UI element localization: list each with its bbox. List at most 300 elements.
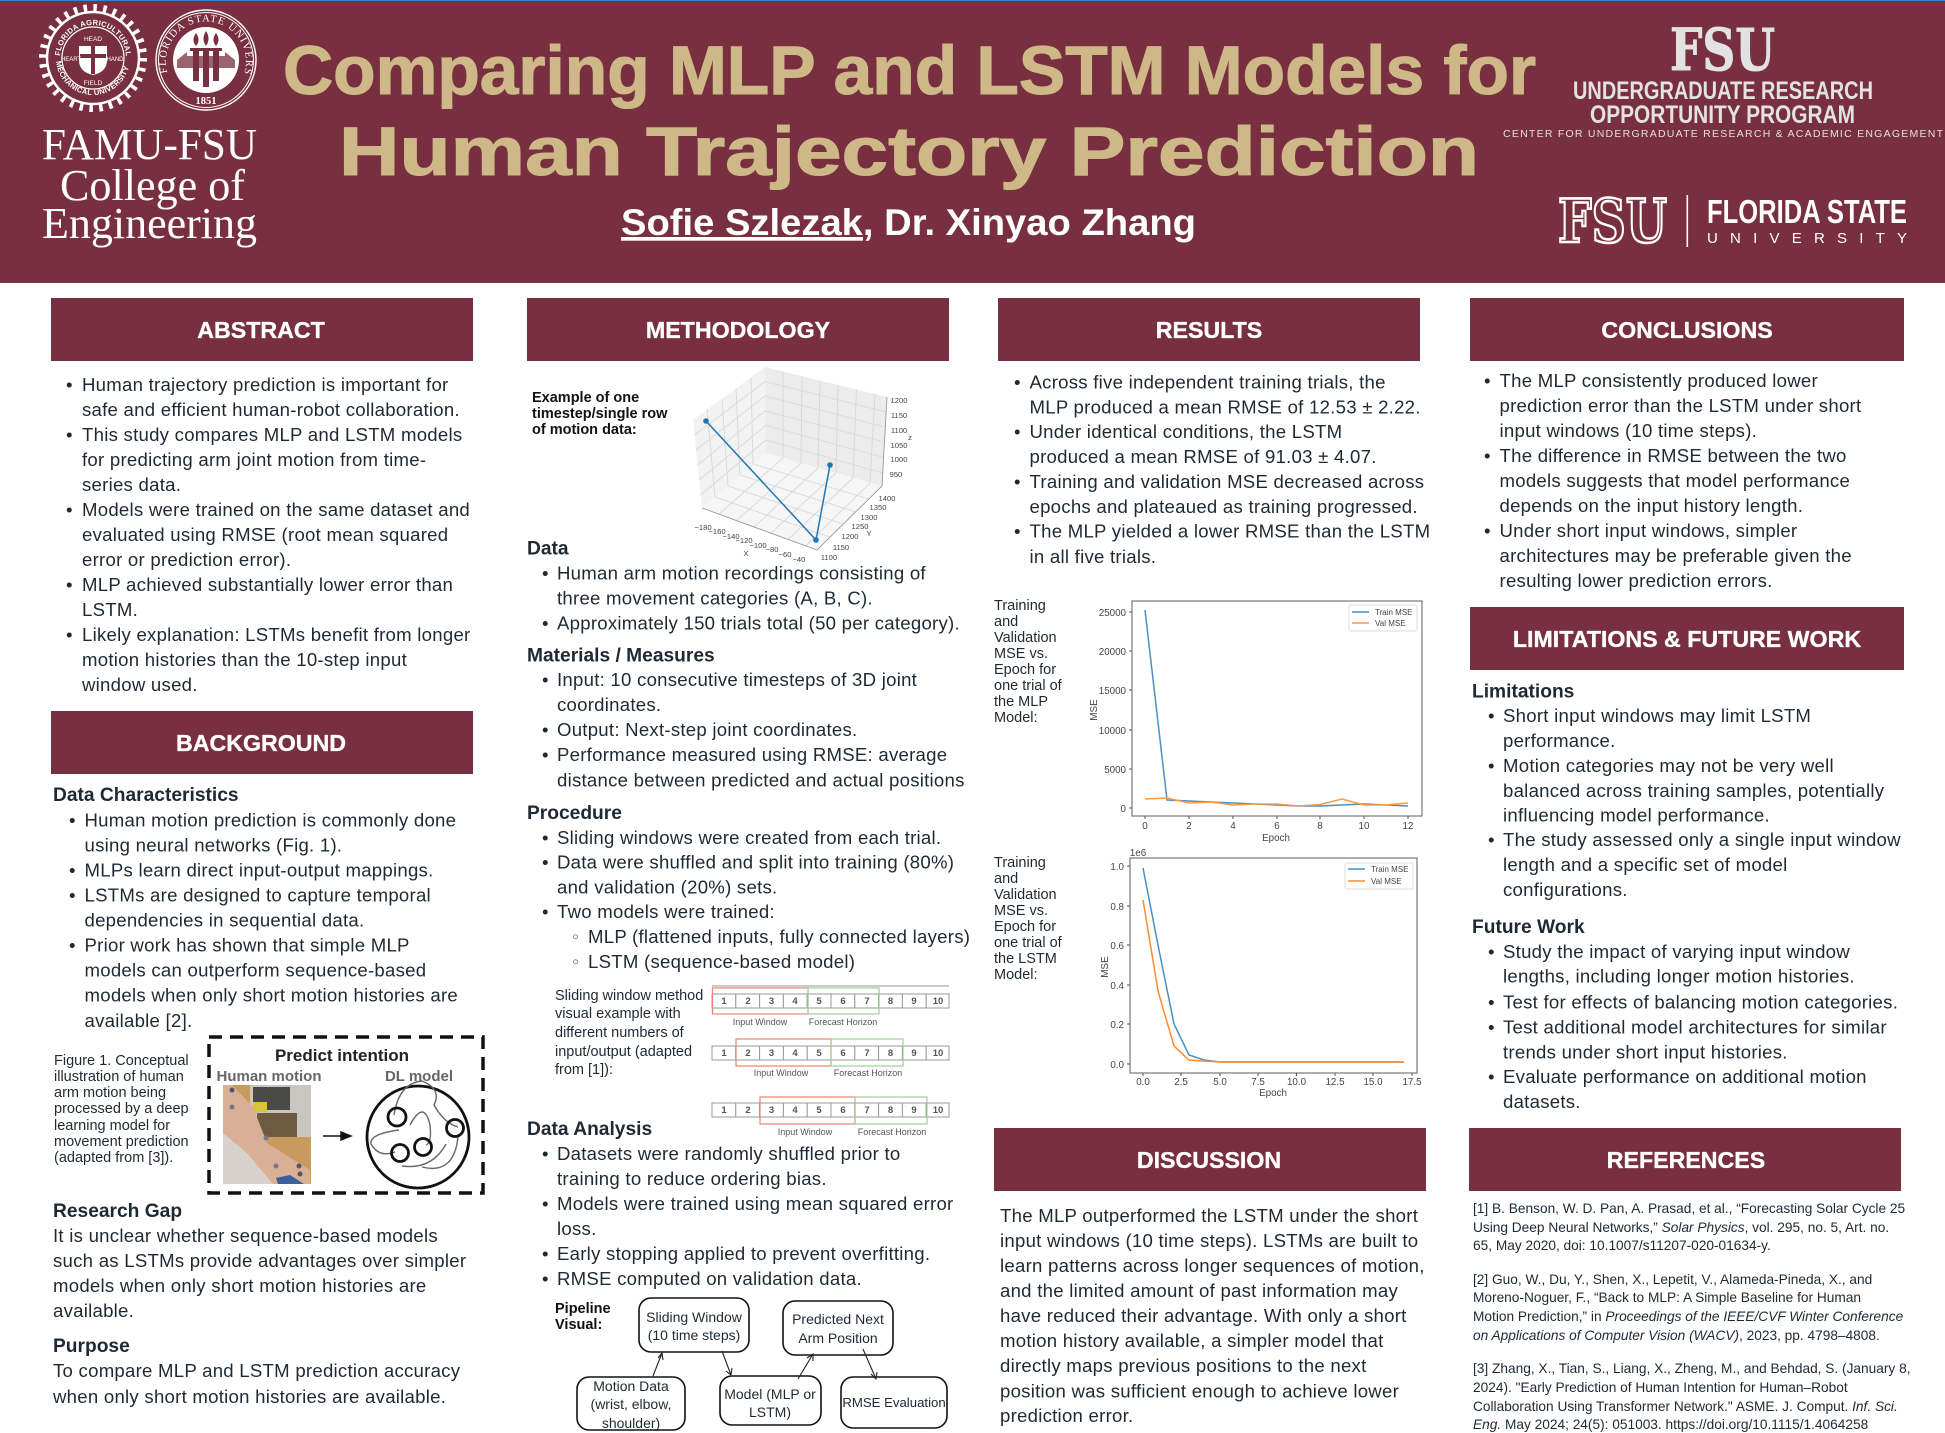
reference list: [3] Zhang, X., Tian, S., Liang, X., Zheng, M., and Behdad, S. (January 8, xyxy=(1473,1361,1910,1376)
logo: FAMU seal: HEAD xyxy=(84,36,102,43)
line chart: LSTM MSE vs epoch: 1e6 xyxy=(1130,848,1147,859)
results bullets: • xyxy=(1014,421,1021,442)
panel: discussion xyxy=(994,1128,1430,1426)
materials bullets: Input: 10 consecutive timesteps of 3D joint xyxy=(557,669,918,690)
limitations bullets: influencing model performance. xyxy=(1503,804,1770,826)
heading: methodology xyxy=(527,298,949,361)
abstract bullets: Models were trained on the same dataset and xyxy=(82,499,470,520)
data analysis bullets: Models were trained using mean squared error xyxy=(557,1193,954,1214)
caption: sliding window: Sliding window method xyxy=(555,988,703,1004)
data analysis bullets: loss. xyxy=(557,1218,596,1239)
logo: Florida State University: FSU xyxy=(1558,187,1667,257)
3D scatter plot of joints: 1400 xyxy=(879,494,895,503)
line chart: LSTM MSE vs epoch: 15.0 xyxy=(1363,1077,1383,1088)
line chart: LSTM MSE vs epoch: Epoch xyxy=(1259,1088,1287,1099)
conclusions bullets: The difference in RMSE between the two xyxy=(1500,445,1847,466)
figure 1 caption: Figure 1. Conceptual xyxy=(54,1053,189,1069)
window row 1: 2 xyxy=(745,996,751,1007)
data characteristics bullets: • xyxy=(69,810,76,830)
procedure bullets: and validation (20%) sets. xyxy=(557,876,777,898)
line chart: LSTM MSE vs epoch: 0.0 xyxy=(1110,1060,1125,1071)
3D scatter plot of joints: 950 xyxy=(890,470,902,479)
line chart: LSTM MSE vs epoch: 5.0 xyxy=(1213,1077,1227,1088)
discussion text: position was sufficient enough to achieve lower xyxy=(1000,1380,1399,1402)
line chart: LSTM MSE vs epoch: 12.5 xyxy=(1325,1077,1345,1088)
line chart: LSTM MSE vs epoch: 17.5 xyxy=(1402,1077,1422,1088)
abstract bullets: • xyxy=(66,574,73,595)
results bullets: epochs and plateaued as training progressed. xyxy=(1030,496,1418,517)
window row 2: 10 xyxy=(933,1048,943,1059)
logo: Florida State University xyxy=(1558,187,1907,257)
logo: FAMU-FSU College of Engineering wordmark: FAMU-FSU xyxy=(42,120,257,169)
limitations bullets: length and a specific set of model xyxy=(1503,854,1787,875)
abstract bullets: This study compares MLP and LSTM models xyxy=(82,424,462,445)
reference list: Motion Prediction,” in Proceedings of the IEEE/CVF Winter Conference xyxy=(1473,1309,1903,1324)
materials bullets: distance between predicted and actual positions xyxy=(557,770,965,790)
data characteristics bullets: • xyxy=(69,934,76,956)
heading: conclusions xyxy=(1470,298,1904,361)
window row 2: 9 xyxy=(911,1048,917,1059)
data bullets: • xyxy=(542,562,549,584)
results bullets: • xyxy=(1014,471,1021,492)
caption: LSTM chart: MSE vs. xyxy=(994,903,1048,919)
title: Human Trajectory Prediction xyxy=(339,113,1479,190)
title xyxy=(283,32,1536,190)
3D scatter plot of joints: −160 xyxy=(708,527,726,536)
materials bullets: coordinates. xyxy=(557,694,661,715)
caption: MLP chart: MSE vs. xyxy=(994,646,1048,662)
window row 2: 8 xyxy=(888,1048,893,1059)
results bullets: The MLP yielded a lower RMSE than the LSTM xyxy=(1030,520,1430,542)
line chart: MLP MSE vs epoch: 25000 xyxy=(1099,608,1127,619)
data bullets: Approximately 150 trials total (50 per category). xyxy=(557,612,960,634)
caption: single row of motion data: timestep/single row xyxy=(532,406,668,422)
heading: limitations and future work: LIMITATIONS & FUTURE WORK xyxy=(1513,626,1861,652)
abstract bullets: evaluated using RMSE (root mean squared xyxy=(82,524,448,545)
pipeline flowchart: Motion Data xyxy=(593,1378,669,1394)
conclusions bullets: resulting lower prediction errors. xyxy=(1500,570,1773,591)
reference list: Eng. May 2024; 24(5): 051003. https://doi.org/10.1115/1.4064258 xyxy=(1473,1417,1868,1432)
window row 1: 10 xyxy=(933,996,943,1007)
window row 3: 10 xyxy=(933,1105,943,1116)
3D scatter plot of joints: 1000 xyxy=(891,455,907,464)
conclusions bullets: • xyxy=(1484,520,1491,541)
panel: background xyxy=(51,711,483,1407)
logo: FAMU-FSU College of Engineering wordmark xyxy=(42,120,257,248)
data analysis bullets: RMSE computed on validation data. xyxy=(557,1268,862,1289)
logo: FAMU seal: HEART xyxy=(61,57,81,63)
pipeline label: Visual: xyxy=(555,1317,602,1333)
line chart: LSTM MSE vs epoch: 2.5 xyxy=(1174,1077,1188,1088)
discussion text: directly maps previous positions to the next xyxy=(1000,1355,1367,1376)
caption: sliding window: from [1]): xyxy=(555,1062,613,1078)
heading: results xyxy=(998,298,1420,361)
conclusions bullets: The MLP consistently produced lower xyxy=(1500,370,1818,391)
subheading: procedure: Procedure xyxy=(527,803,622,824)
abstract bullets: for predicting arm joint motion from time- xyxy=(82,449,426,470)
pipeline flowchart: (wrist, elbow, xyxy=(591,1396,671,1412)
data characteristics bullets: models when only short motion histories are xyxy=(84,984,458,1006)
discussion text: motion history available, a simpler model that xyxy=(1000,1330,1384,1351)
data characteristics bullets: • xyxy=(69,860,76,880)
line chart: MLP MSE vs epoch: 20000 xyxy=(1099,647,1127,658)
legend: Train MSE xyxy=(1371,865,1408,874)
limitations bullets: Short input windows may limit LSTM xyxy=(1503,705,1811,726)
reference list: 65, May 2020, doi: 10.1007/s11207-020-01634-y. xyxy=(1473,1238,1771,1253)
caption: LSTM chart: Epoch for xyxy=(994,919,1056,935)
logo: FSU Undergraduate Research Opportunity Program xyxy=(1503,16,1944,140)
window row 3: 5 xyxy=(816,1105,822,1116)
line chart: MLP MSE vs epoch: 6 xyxy=(1274,821,1280,832)
caption: MLP chart: the MLP xyxy=(994,694,1048,710)
panel: conclusions xyxy=(1470,298,1904,591)
procedure bullets: ◦ xyxy=(572,926,579,948)
abstract bullets: Human trajectory prediction is important for xyxy=(82,374,448,395)
window row 1: Input Window xyxy=(733,1017,788,1027)
panel: methodology xyxy=(527,298,976,1431)
pipeline flowchart xyxy=(577,1298,947,1431)
future work bullets: • xyxy=(1488,941,1495,962)
conclusions bullets: input windows (10 time steps). xyxy=(1500,420,1757,441)
research gap text: available. xyxy=(53,1300,134,1321)
line chart: LSTM MSE vs epoch: 0.6 xyxy=(1110,941,1125,952)
window row 2: 1 xyxy=(721,1048,727,1059)
line chart: MLP MSE vs epoch xyxy=(1089,601,1422,844)
figure 1 caption: arm motion being xyxy=(54,1085,166,1101)
title: Comparing MLP and LSTM Models for xyxy=(283,32,1536,109)
3D scatter plot of joints: 1250 xyxy=(852,522,868,531)
abstract bullets: error or prediction error). xyxy=(82,549,291,570)
authors: Sofie Szlezak, Dr. Xinyao Zhang xyxy=(621,202,1196,243)
data characteristics bullets: • xyxy=(69,884,76,906)
data analysis bullets: training to reduce ordering bias. xyxy=(557,1168,827,1189)
3D scatter plot of joints: −180 xyxy=(694,523,712,532)
subheading: research gap: Research Gap xyxy=(53,1201,182,1222)
heading: discussion: DISCUSSION xyxy=(1137,1147,1281,1173)
line chart: MLP MSE vs epoch: MSE xyxy=(1089,699,1100,721)
abstract bullets: safe and efficient human-robot collaboration. xyxy=(82,399,460,420)
procedure bullets: LSTM (sequence-based model) xyxy=(588,951,855,972)
window row 1: 1 xyxy=(721,996,727,1007)
figure 1 caption: movement prediction xyxy=(54,1134,189,1150)
legend: Val MSE xyxy=(1375,619,1406,628)
data analysis bullets: Early stopping applied to prevent overfitting. xyxy=(557,1243,930,1264)
pipeline flowchart: LSTM) xyxy=(749,1404,791,1420)
future work bullets: Study the impact of varying input window xyxy=(1503,941,1850,962)
future work bullets: • xyxy=(1488,992,1495,1013)
abstract bullets: • xyxy=(66,624,73,645)
line chart: MLP MSE vs epoch: 2 xyxy=(1186,821,1192,832)
window row 3: 2 xyxy=(745,1105,751,1116)
heading: abstract xyxy=(51,298,473,361)
line chart: MLP MSE vs epoch: 12 xyxy=(1403,821,1413,832)
future work bullets: trends under short input histories. xyxy=(1503,1042,1788,1062)
logo: FAMU seal: HAND xyxy=(106,57,124,63)
results bullets: • xyxy=(1014,520,1021,542)
caption: sliding window: visual example with xyxy=(555,1006,681,1022)
line chart: MLP MSE vs epoch: 4 xyxy=(1230,821,1236,832)
window row 2: 3 xyxy=(769,1048,774,1059)
caption: sliding window: input/output (adapted xyxy=(555,1044,692,1060)
heading: results: RESULTS xyxy=(1156,317,1262,343)
caption: single row of motion data: Example of one xyxy=(532,390,639,406)
window row 3: Forecast Horizon xyxy=(858,1127,926,1137)
logo: Florida State University: UNIVERSITY xyxy=(1707,230,1907,247)
3D scatter plot of joints: 1300 xyxy=(861,513,877,522)
3D scatter plot of joints: 1100 xyxy=(891,426,907,435)
window row 2: 5 xyxy=(816,1048,822,1059)
heading: discussion xyxy=(994,1128,1426,1191)
window row 1: 4 xyxy=(792,996,798,1007)
window row 1: 9 xyxy=(911,996,917,1007)
pipeline flowchart: RMSE Evaluation xyxy=(842,1395,946,1410)
line chart: LSTM MSE vs epoch: 10.0 xyxy=(1287,1077,1307,1088)
abstract bullets: Likely explanation: LSTMs benefit from longer xyxy=(82,624,470,645)
3D scatter plot of joints xyxy=(693,367,912,564)
data characteristics bullets: Prior work has shown that simple MLP xyxy=(84,934,409,956)
photo of instrumented arm xyxy=(223,1085,311,1184)
research gap text: models when only short motion histories are xyxy=(53,1275,427,1296)
3D scatter plot of joints: 1150 xyxy=(891,411,907,420)
abstract bullets: MLP achieved substantially lower error than xyxy=(82,574,453,595)
window row 2 xyxy=(712,1039,949,1078)
3D scatter plot of joints: −60 xyxy=(779,550,791,559)
purpose text: when only short motion histories are available. xyxy=(52,1386,446,1407)
reference list: [2] Guo, W., Du, Y., Shen, X., Lepetit, V., Alameda-Pineda, X., and xyxy=(1473,1272,1872,1287)
window row 1: 7 xyxy=(864,996,870,1007)
logo: FSU Undergraduate Research Opportunity Program: OPPORTUNITY PROGRAM xyxy=(1590,101,1855,129)
data bullets: Human arm motion recordings consisting of xyxy=(557,562,926,584)
caption: LSTM chart: one trial of xyxy=(994,935,1063,951)
abstract bullets: • xyxy=(66,374,73,395)
abstract bullets: series data. xyxy=(82,474,181,495)
window row 3 xyxy=(712,1097,949,1137)
procedure bullets: • xyxy=(542,852,549,872)
window row 2: Input Window xyxy=(754,1068,809,1078)
heading: methodology: METHODOLOGY xyxy=(646,317,831,343)
logo: FSU Undergraduate Research Opportunity Program: UNDERGRADUATE RESEARCH xyxy=(1573,77,1873,105)
window row 3: 7 xyxy=(864,1105,870,1116)
sliding window diagram xyxy=(712,986,949,1137)
pipeline flowchart: (10 time steps) xyxy=(648,1327,740,1343)
window row 3: 8 xyxy=(888,1105,893,1116)
abstract bullets: motion histories than the 10-step input xyxy=(82,649,408,670)
materials bullets: • xyxy=(542,669,549,690)
materials bullets: Performance measured using RMSE: average xyxy=(557,744,947,765)
window row 1: Forecast Horizon xyxy=(809,1017,877,1027)
subheading: future work: Future Work xyxy=(1472,917,1585,938)
line chart: MLP MSE vs epoch: 10 xyxy=(1359,821,1370,832)
logo: FAMU-FSU College of Engineering wordmark: Engineering xyxy=(42,199,257,248)
figure 1 caption: processed by a deep xyxy=(54,1101,189,1117)
window row 1: 3 xyxy=(769,996,774,1007)
results bullets: produced a mean RMSE of 91.03 ± 4.07. xyxy=(1030,446,1377,467)
heading: background: BACKGROUND xyxy=(176,730,346,756)
limitations bullets: • xyxy=(1488,829,1495,850)
limitations bullets: balanced across training samples, potentially xyxy=(1503,780,1885,801)
abstract bullets: • xyxy=(66,424,73,445)
procedure bullets: ◦ xyxy=(572,951,579,973)
pipeline arrows xyxy=(653,1349,877,1379)
results bullets: Across five independent training trials, the xyxy=(1030,372,1386,392)
3D scatter plot of joints: X xyxy=(743,549,749,558)
pipeline flowchart: shoulder) xyxy=(602,1415,660,1431)
legend xyxy=(1349,605,1417,631)
reference list: 2024). "Early Prediction of Human Intention for Human–Robot xyxy=(1473,1380,1848,1395)
data characteristics bullets: using neural networks (Fig. 1). xyxy=(84,834,342,856)
caption: MLP chart: Epoch for xyxy=(994,662,1056,678)
3D scatter plot of joints: 1100 xyxy=(821,553,837,562)
3D scatter plot of joints: 1150 xyxy=(833,543,849,552)
future work bullets: • xyxy=(1488,1016,1495,1038)
3D scatter plot of joints: −40 xyxy=(792,555,805,564)
caption: MLP chart: Validation xyxy=(994,630,1057,646)
data characteristics bullets: dependencies in sequential data. xyxy=(84,910,364,930)
line chart: LSTM MSE vs epoch: 1.0 xyxy=(1110,862,1125,873)
window row 2: 7 xyxy=(864,1048,870,1059)
future work bullets: datasets. xyxy=(1503,1091,1581,1112)
results bullets: in all five trials. xyxy=(1030,546,1156,567)
window row 1: 5 xyxy=(816,996,822,1007)
abstract bullets: • xyxy=(66,499,73,520)
window row 3: 9 xyxy=(911,1105,917,1116)
subheading: data analysis: Data Analysis xyxy=(527,1119,652,1140)
caption: sliding window: different numbers of xyxy=(555,1025,685,1041)
caption: MLP chart: and xyxy=(994,614,1018,630)
limitations bullets: performance. xyxy=(1503,730,1616,751)
discussion text: The MLP outperformed the LSTM under the short xyxy=(1000,1205,1419,1226)
line chart: MLP MSE vs epoch: 8 xyxy=(1317,821,1323,832)
window row 1: 6 xyxy=(840,996,846,1007)
reference list: Using Deep Neural Networks,” Solar Physics, vol. 295, no. 5, Art. no. xyxy=(1473,1220,1889,1235)
window row 3: 6 xyxy=(840,1105,846,1116)
data analysis bullets: • xyxy=(542,1193,549,1214)
data characteristics bullets: models can outperform sequence-based xyxy=(84,960,426,980)
results bullets: MLP produced a mean RMSE of 12.53 ± 2.22. xyxy=(1030,396,1421,418)
limitations bullets: • xyxy=(1488,705,1495,726)
header banner xyxy=(0,0,1945,283)
procedure bullets: • xyxy=(542,901,549,922)
results bullets: • xyxy=(1014,372,1021,392)
subheading: limitations: Limitations xyxy=(1472,682,1574,702)
line chart: LSTM MSE vs epoch: 7.5 xyxy=(1251,1077,1265,1088)
conclusions bullets: Under short input windows, simpler xyxy=(1500,520,1797,541)
procedure bullets: Data were shuffled and split into training (80%) xyxy=(557,852,954,872)
3D scatter plot of joints: −100 xyxy=(749,541,767,550)
figure 1 caption: learning model for xyxy=(54,1118,170,1134)
window row 3: 1 xyxy=(721,1105,727,1116)
limitations bullets: Motion categories may not be very well xyxy=(1503,755,1834,776)
figure 1: predict intention diagram: Human motion xyxy=(216,1068,322,1085)
pipeline flowchart: Predicted Next xyxy=(792,1311,884,1327)
line chart: MLP MSE vs epoch: 0 xyxy=(1121,804,1127,815)
logo: FSU Undergraduate Research Opportunity Program: FSU xyxy=(1670,16,1775,84)
caption: LSTM chart: and xyxy=(994,871,1018,887)
subheading: materials: Materials / Measures xyxy=(527,646,715,666)
caption: LSTM chart: Training xyxy=(994,855,1046,871)
reference list: on Applications of Computer Vision (WACV), 2023, pp. 4798–4808. xyxy=(1473,1328,1880,1343)
data analysis bullets: • xyxy=(542,1143,549,1164)
3D scatter plot of joints: −120 xyxy=(735,536,753,545)
future work bullets: • xyxy=(1488,1066,1495,1087)
future work bullets: Test for effects of balancing motion categories. xyxy=(1503,992,1898,1013)
3D scatter plot of joints: 1050 xyxy=(891,441,907,450)
conclusions bullets: • xyxy=(1484,445,1491,466)
heading: limitations and future work xyxy=(1470,607,1904,670)
materials bullets: • xyxy=(542,744,549,765)
abstract bullets: LSTM. xyxy=(82,599,138,620)
data analysis bullets: • xyxy=(542,1243,549,1264)
caption: MLP chart: one trial of xyxy=(994,678,1063,694)
logo: FSU seal: 1851 xyxy=(196,96,216,107)
figure 1 caption: illustration of human xyxy=(54,1069,184,1085)
window row 3: 3 xyxy=(769,1105,774,1116)
caption: LSTM chart: the LSTM xyxy=(994,951,1057,967)
line chart: MLP MSE vs epoch: Epoch xyxy=(1262,833,1290,844)
line chart: LSTM MSE vs epoch: 0.0 xyxy=(1136,1077,1150,1088)
logo: FAMU seal: MECHANICAL UNIVERSITY xyxy=(56,61,128,95)
3D scatter plot of joints: −140 xyxy=(722,532,740,541)
neural network circle xyxy=(367,1081,469,1188)
conclusions bullets: architectures may be preferable given the xyxy=(1500,545,1852,566)
discussion text: prediction error. xyxy=(1000,1405,1133,1426)
data analysis bullets: Datasets were randomly shuffled prior to xyxy=(557,1143,900,1164)
caption: MLP chart: Training xyxy=(994,598,1046,614)
line chart: LSTM MSE vs epoch: 0.8 xyxy=(1110,902,1125,913)
data analysis bullets: • xyxy=(542,1268,549,1289)
discussion text: input windows (10 time steps). LSTMs are built to xyxy=(1000,1230,1418,1251)
subheading: data characteristics: Data Characteristics xyxy=(53,785,239,806)
discussion text: learn patterns across longer sequences of motion, xyxy=(1000,1255,1425,1276)
results bullets: Training and validation MSE decreased across xyxy=(1030,471,1424,492)
purpose text: To compare MLP and LSTM prediction accuracy xyxy=(53,1360,461,1381)
caption: MLP chart: Model: xyxy=(994,710,1038,726)
future work bullets: Evaluate performance on additional motion xyxy=(1503,1066,1867,1087)
conclusions bullets: models suggests that model performance xyxy=(1500,470,1850,491)
pipeline flowchart: Arm Position xyxy=(798,1330,878,1346)
pipeline label: Pipeline xyxy=(555,1301,611,1317)
logo: FAMU seal: FLORIDA AGRICULTURAL xyxy=(55,20,131,56)
results bullets: Under identical conditions, the LSTM xyxy=(1030,421,1342,442)
window row 2: 4 xyxy=(792,1048,798,1059)
3D scatter plot of joints: 1200 xyxy=(842,532,858,541)
conclusions bullets: depends on the input history length. xyxy=(1500,495,1803,516)
data characteristics bullets: LSTMs are designed to capture temporal xyxy=(84,884,431,906)
logo: FSU Undergraduate Research Opportunity Program: CENTER FOR UNDERGRADUATE RESEARCH & ACADEMIC ENGAGEMENT xyxy=(1503,128,1944,140)
line chart: LSTM MSE vs epoch: 0.4 xyxy=(1110,981,1125,992)
figure 1 caption: (adapted from [3]). xyxy=(54,1150,173,1166)
caption: LSTM chart: Model: xyxy=(994,967,1038,983)
heading: references: REFERENCES xyxy=(1607,1147,1765,1173)
heading: references xyxy=(1469,1128,1901,1191)
discussion text: have reduced their advantage. With only a short xyxy=(1000,1305,1407,1326)
3D scatter plot of joints: 1350 xyxy=(870,503,886,512)
heading: conclusions: CONCLUSIONS xyxy=(1601,317,1773,343)
legend xyxy=(1345,863,1413,889)
subheading: purpose: Purpose xyxy=(53,1336,130,1357)
materials bullets: • xyxy=(542,719,549,740)
conclusions bullets: prediction error than the LSTM under short xyxy=(1500,395,1862,416)
caption: LSTM chart: Validation xyxy=(994,887,1057,903)
panel: references xyxy=(1469,1128,1914,1432)
figure 1: predict intention diagram: DL model xyxy=(385,1068,453,1085)
3D scatter plot of joints: Y xyxy=(866,529,872,538)
figure 1: predict intention diagram: Predict intention xyxy=(275,1046,409,1065)
data characteristics bullets: MLPs learn direct input-output mappings. xyxy=(84,860,434,880)
future work bullets: lengths, including longer motion histories. xyxy=(1503,966,1855,987)
legend: Val MSE xyxy=(1371,877,1402,886)
panel: abstract xyxy=(51,298,476,695)
